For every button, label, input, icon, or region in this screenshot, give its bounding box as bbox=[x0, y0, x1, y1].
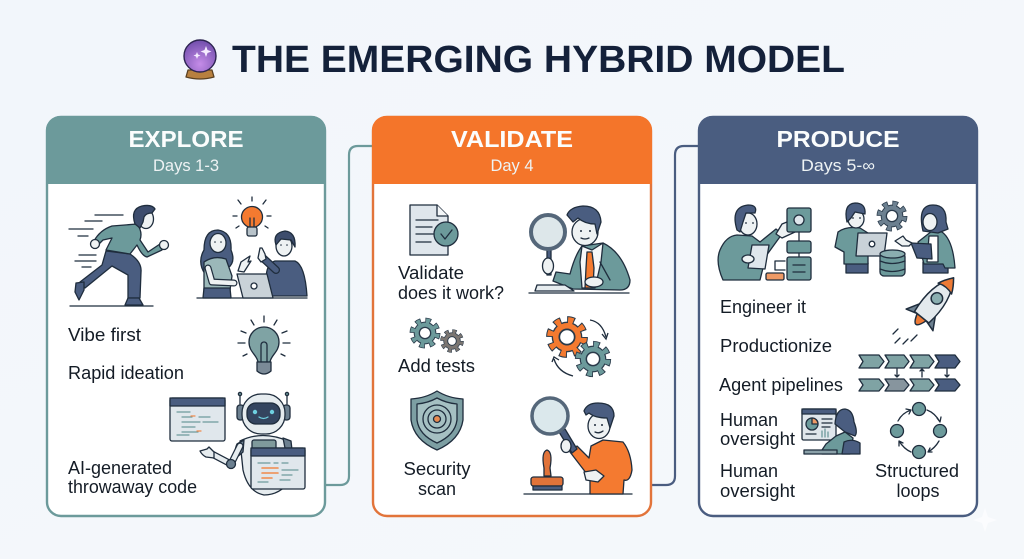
icon: crystal ball bbox=[184, 40, 216, 79]
explore header: Days 1-3 bbox=[153, 157, 219, 175]
panel: validate bbox=[372, 116, 652, 516]
produce header: PRODUCE bbox=[776, 126, 900, 152]
text: does it work: does it work? bbox=[398, 283, 504, 303]
panel: explore bbox=[46, 116, 326, 516]
icon: running person bbox=[69, 205, 168, 306]
text: human oversight first: Human bbox=[720, 410, 778, 430]
chart: agent pipeline chevrons bbox=[859, 355, 960, 391]
panel: produce bbox=[698, 116, 978, 516]
validate header: VALIDATE bbox=[451, 126, 573, 152]
arrow: explore to validate connector bbox=[326, 146, 372, 485]
icon: inspector with magnifier and stamp bbox=[524, 398, 632, 494]
icon: person at dashboard bbox=[802, 409, 860, 454]
title bbox=[184, 39, 845, 81]
text: rapid ideation: Rapid ideation bbox=[68, 363, 184, 383]
icon: small gears bbox=[413, 321, 461, 350]
icon: document with check bbox=[410, 205, 458, 255]
text: oversight first: oversight bbox=[720, 429, 795, 449]
produce header bbox=[698, 116, 978, 184]
icon: security shield bbox=[411, 391, 463, 450]
arrow: validate to produce connector bbox=[652, 146, 698, 485]
explore header bbox=[46, 116, 326, 184]
text: validate does it work: Validate bbox=[398, 263, 464, 283]
icon: robot with code windows bbox=[170, 392, 305, 495]
produce header: Days 5-∞ bbox=[801, 157, 875, 175]
text: vibe first: Vibe first bbox=[68, 325, 141, 345]
icon: teal lightbulb bbox=[238, 316, 290, 374]
icon: rocket bbox=[893, 267, 967, 344]
text: agent pipelines: Agent pipelines bbox=[719, 375, 843, 395]
icon: team gear bbox=[880, 204, 904, 228]
icon: team brainstorming with lightbulb bbox=[197, 197, 307, 298]
text: AI-generated throwaway code: AI-generated bbox=[68, 458, 172, 478]
text: oversight second: oversight bbox=[720, 481, 795, 501]
text: add tests: Add tests bbox=[398, 356, 475, 376]
validate header bbox=[372, 116, 652, 184]
text: human oversight second: Human bbox=[720, 461, 778, 481]
text: structured loops: Structured bbox=[875, 461, 959, 481]
text: engineer it: Engineer it bbox=[720, 297, 806, 317]
text: loops: loops bbox=[896, 481, 940, 501]
title text: THE EMERGING HYBRID MODEL bbox=[232, 39, 845, 81]
icon: orange and teal gears bbox=[551, 320, 608, 376]
text: security scan: Security bbox=[404, 459, 470, 479]
explore header: EXPLORE bbox=[128, 126, 244, 152]
icon: engineer with blocks bbox=[718, 205, 811, 280]
text: productionize: Productionize bbox=[720, 336, 832, 356]
text: throwaway code: throwaway code bbox=[68, 477, 197, 497]
icon: structured loop bbox=[890, 402, 946, 458]
icon: reviewer with magnifier bbox=[529, 206, 630, 293]
icon: team with laptop and database bbox=[835, 203, 955, 276]
text: scan: scan bbox=[418, 479, 456, 499]
validate header: Day 4 bbox=[490, 157, 534, 175]
